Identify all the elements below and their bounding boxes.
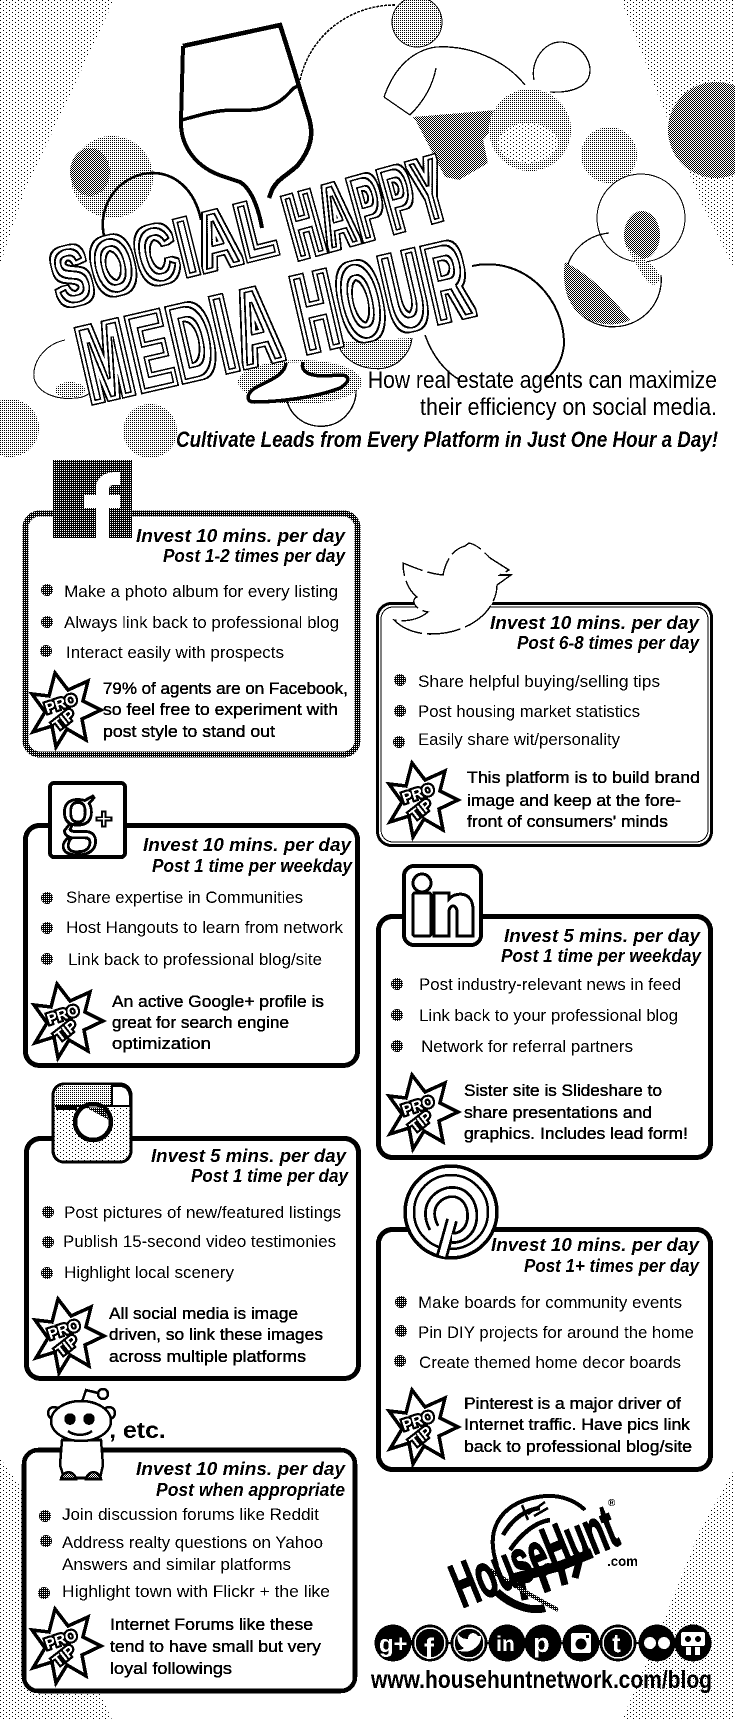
instagram pro tip text: across multiple platforms <box>109 1347 306 1366</box>
social: tumblr: t <box>612 1628 621 1658</box>
facebook bullets: Make a photo album for every listing <box>64 582 338 601</box>
pro tip star: TIP <box>407 796 436 824</box>
pro tip star <box>32 673 101 747</box>
icon: google plus <box>50 768 125 857</box>
instagram bullets: Publish 15-second video testimonies <box>63 1232 336 1251</box>
pinterest pro tip text: Pinterest is a major driver of <box>464 1394 681 1413</box>
social: flickr <box>638 1624 676 1662</box>
panel: twitter <box>378 543 712 846</box>
linkedin bullets: Post industry-relevant news in feed <box>419 975 681 994</box>
reddit invest heading: Invest 10 mins. per day <box>136 1458 347 1479</box>
pro tip star: PRO <box>400 1408 436 1434</box>
social: facebook: f <box>424 1633 435 1666</box>
facebook pro tip text: so feel free to experiment with <box>103 700 338 719</box>
title: hour: HOUR <box>284 216 485 374</box>
bubble: right outline <box>597 174 685 262</box>
pinterest bullets <box>394 1293 694 1372</box>
bubble: small right <box>581 127 637 183</box>
icon: reddit alien <box>48 1389 115 1479</box>
facebook invest heading <box>136 525 347 566</box>
pro tip star: TIP <box>53 1332 82 1360</box>
instagram bullets: Post pictures of new/featured listings <box>64 1203 341 1222</box>
social: linkedin: in <box>496 1633 515 1656</box>
linkedin pro tip text <box>464 1081 688 1143</box>
instagram invest heading: Post 1 time per day <box>191 1165 350 1186</box>
facebook bullets: Always link back to professional blog <box>64 613 339 632</box>
twitter pro tip text: front of consumers' minds <box>467 812 668 831</box>
bubble: small outline <box>533 42 590 92</box>
bubble: top <box>392 0 442 47</box>
bubble: left outline <box>103 173 201 240</box>
linkedin bullets: Link back to your professional blog <box>419 1006 678 1025</box>
facebook pro tip text <box>103 679 348 741</box>
reddit bullets: Answers and similar platforms <box>62 1555 291 1574</box>
pinterest pro tip text: Internet traffic. Have pics link <box>464 1415 691 1434</box>
bubble: lower gray <box>123 404 177 458</box>
instagram invest heading: Invest 5 mins. per day <box>151 1145 348 1166</box>
panel: linkedin <box>378 866 710 1158</box>
pro tip star: PRO <box>43 1627 79 1653</box>
reddit bullets <box>38 1505 330 1601</box>
pro tip star: PRO <box>45 1002 81 1028</box>
subtitle <box>176 367 718 452</box>
reddit pro tip text: Internet Forums like these <box>110 1615 313 1634</box>
reddit pro tip text: loyal followings <box>110 1659 232 1678</box>
pro tip star: TIP <box>50 1642 79 1670</box>
social: pinterest: p <box>533 1628 550 1658</box>
linkedin invest heading: Post 1 time per weekday <box>501 945 703 966</box>
twitter bullets <box>393 672 660 749</box>
linkedin invest heading <box>501 925 703 966</box>
pro tip star <box>389 1390 458 1464</box>
globe <box>490 1496 592 1610</box>
twitter pro tip text: This platform is to build brand <box>467 768 700 787</box>
bubble: left gray <box>71 136 153 218</box>
social: slideshare <box>674 1624 712 1662</box>
reddit bullets: Highlight town with Flickr + the like <box>62 1582 330 1601</box>
twitter bullets: Share helpful buying/selling tips <box>418 672 660 691</box>
social icons row <box>374 1624 712 1666</box>
wine surface <box>182 86 298 120</box>
reddit bullets: Address realty questions on Yahoo <box>62 1533 323 1552</box>
twitter invest heading: Post 6-8 times per day <box>517 632 701 653</box>
linkedin pro tip text: graphics. Includes lead form! <box>464 1124 688 1143</box>
icon: google plus: g <box>60 768 97 856</box>
glass bowl <box>183 25 311 198</box>
linkedin bullets: Network for referral partners <box>421 1037 633 1056</box>
bubble: lower left outline <box>34 340 103 398</box>
pro tip star <box>389 763 458 837</box>
pinterest invest heading: Invest 10 mins. per day <box>491 1234 701 1255</box>
title: media: MEDIA <box>70 264 294 424</box>
google plus pro tip text <box>112 992 324 1053</box>
pro tip star: TIP <box>52 1017 81 1045</box>
panel: pinterest <box>378 1166 710 1470</box>
reddit pro tip text: tend to have small but very <box>110 1637 322 1656</box>
icon: pinterest <box>405 1166 497 1258</box>
pinterest invest heading <box>491 1234 701 1276</box>
pro tip star <box>34 984 103 1058</box>
icon: google plus: + <box>95 803 113 836</box>
google plus invest heading <box>143 834 354 876</box>
google plus invest heading: Post 1 time per weekday <box>152 855 354 876</box>
panel: instagram <box>26 1084 358 1378</box>
panel: facebook <box>26 460 358 754</box>
pro tip star <box>32 1609 101 1683</box>
linkedin bullets <box>391 975 681 1056</box>
facebook invest heading: Post 1-2 times per day <box>163 545 347 566</box>
decorative bubbles <box>0 0 735 458</box>
reddit invest heading: Post when appropriate <box>156 1479 345 1500</box>
pro tip star: PRO <box>400 1093 436 1119</box>
twitter bullets: Easily share wit/personality <box>418 730 620 749</box>
twitter bullets: Post housing market statistics <box>418 702 640 721</box>
bubble: far right <box>668 82 735 178</box>
pinterest pro tip text <box>464 1394 692 1456</box>
pinterest bullets: Make boards for community events <box>418 1293 682 1312</box>
pro tip star: PRO <box>46 1317 82 1343</box>
dot com: .com <box>607 1553 638 1569</box>
linkedin invest heading: Invest 5 mins. per day <box>504 925 702 946</box>
social: tumblr <box>600 1624 636 1662</box>
google plus pro tip text: optimization <box>112 1034 211 1053</box>
google plus invest heading: Invest 10 mins. per day <box>143 834 353 855</box>
social: google plus <box>374 1624 412 1662</box>
wine glass <box>181 25 348 402</box>
google plus bullets: Share expertise in Communities <box>66 888 303 907</box>
twitter pro tip text: image and keep at the fore- <box>467 791 681 810</box>
social: instagram <box>562 1624 600 1662</box>
pro tip star: TIP <box>407 1423 436 1451</box>
facebook bullets <box>40 582 339 662</box>
title: social: SOCIAL <box>44 182 286 322</box>
social: linkedin <box>488 1624 526 1662</box>
pinterest pro tip text: back to professional blog/site <box>464 1437 692 1456</box>
linkedin pro tip text: share presentations and <box>464 1103 652 1122</box>
registered mark: ® <box>608 1498 616 1509</box>
pinterest bullets: Pin DIY projects for around the home <box>418 1323 694 1342</box>
facebook pro tip text: post style to stand out <box>103 722 275 741</box>
pro tip star <box>389 1075 458 1149</box>
icon: facebook <box>53 460 132 538</box>
social: twitter <box>450 1624 488 1662</box>
instagram bullets: Highlight local scenery <box>64 1263 234 1282</box>
panel: reddit and forums <box>24 1389 355 1691</box>
bubble: large ring <box>472 264 564 380</box>
facebook bullets: Interact easily with prospects <box>66 643 284 662</box>
social: pinterest <box>524 1624 562 1662</box>
bubble: left edge <box>0 399 39 457</box>
pro tip star: PRO <box>43 691 79 717</box>
instagram pro tip text: All social media is image <box>109 1304 298 1323</box>
pro tip star <box>35 1299 104 1373</box>
facebook pro tip text: 79% of agents are on Facebook, <box>103 679 348 698</box>
facebook invest heading: Invest 10 mins. per day <box>136 525 347 546</box>
pinterest invest heading: Post 1+ times per day <box>524 1255 701 1276</box>
linkedin pro tip text: Sister site is Slideshare to <box>464 1081 662 1100</box>
reddit pro tip text <box>110 1615 322 1678</box>
pinterest bullets: Create themed home decor boards <box>419 1353 681 1372</box>
icon: linkedin <box>404 866 481 945</box>
title: happy: HAPPY <box>277 138 459 276</box>
pro tip star: TIP <box>407 1108 436 1136</box>
icon: twitter bird <box>394 543 511 634</box>
logo: househunt <box>441 1493 638 1621</box>
social: facebook <box>412 1624 448 1666</box>
instagram pro tip text: driven, so link these images <box>109 1325 323 1344</box>
panel: google plus <box>26 768 358 1066</box>
google plus bullets <box>41 888 343 969</box>
twitter invest heading: Invest 10 mins. per day <box>490 612 701 633</box>
bubble: behind hour <box>338 338 412 369</box>
twitter invest heading <box>490 612 701 653</box>
bubble: large reflecting glass <box>384 47 525 97</box>
twitter pro tip text <box>467 768 700 831</box>
bubble: middle right <box>489 89 571 171</box>
google plus bullets: Link back to professional blog/site <box>68 950 322 969</box>
instagram bullets <box>41 1203 341 1282</box>
icon: instagram <box>53 1084 131 1162</box>
instagram invest heading <box>151 1145 350 1186</box>
google plus bullets: Host Hangouts to learn from network <box>66 918 343 937</box>
bubble: under foot <box>238 360 362 404</box>
pro tip star: PRO <box>400 781 436 807</box>
google plus pro tip text: great for search engine <box>112 1013 289 1032</box>
instagram pro tip text <box>109 1304 323 1366</box>
reddit bullets: Join discussion forums like Reddit <box>62 1505 319 1524</box>
pro tip star: TIP <box>50 706 79 734</box>
bubble: lower right with wedge <box>565 233 661 327</box>
etc label: , etc. <box>109 1417 166 1443</box>
reddit invest heading <box>136 1458 347 1500</box>
title <box>44 138 485 424</box>
social: google plus: g+ <box>379 1631 408 1658</box>
glass foot <box>248 362 348 402</box>
google plus pro tip text: An active Google+ profile is <box>112 992 324 1011</box>
